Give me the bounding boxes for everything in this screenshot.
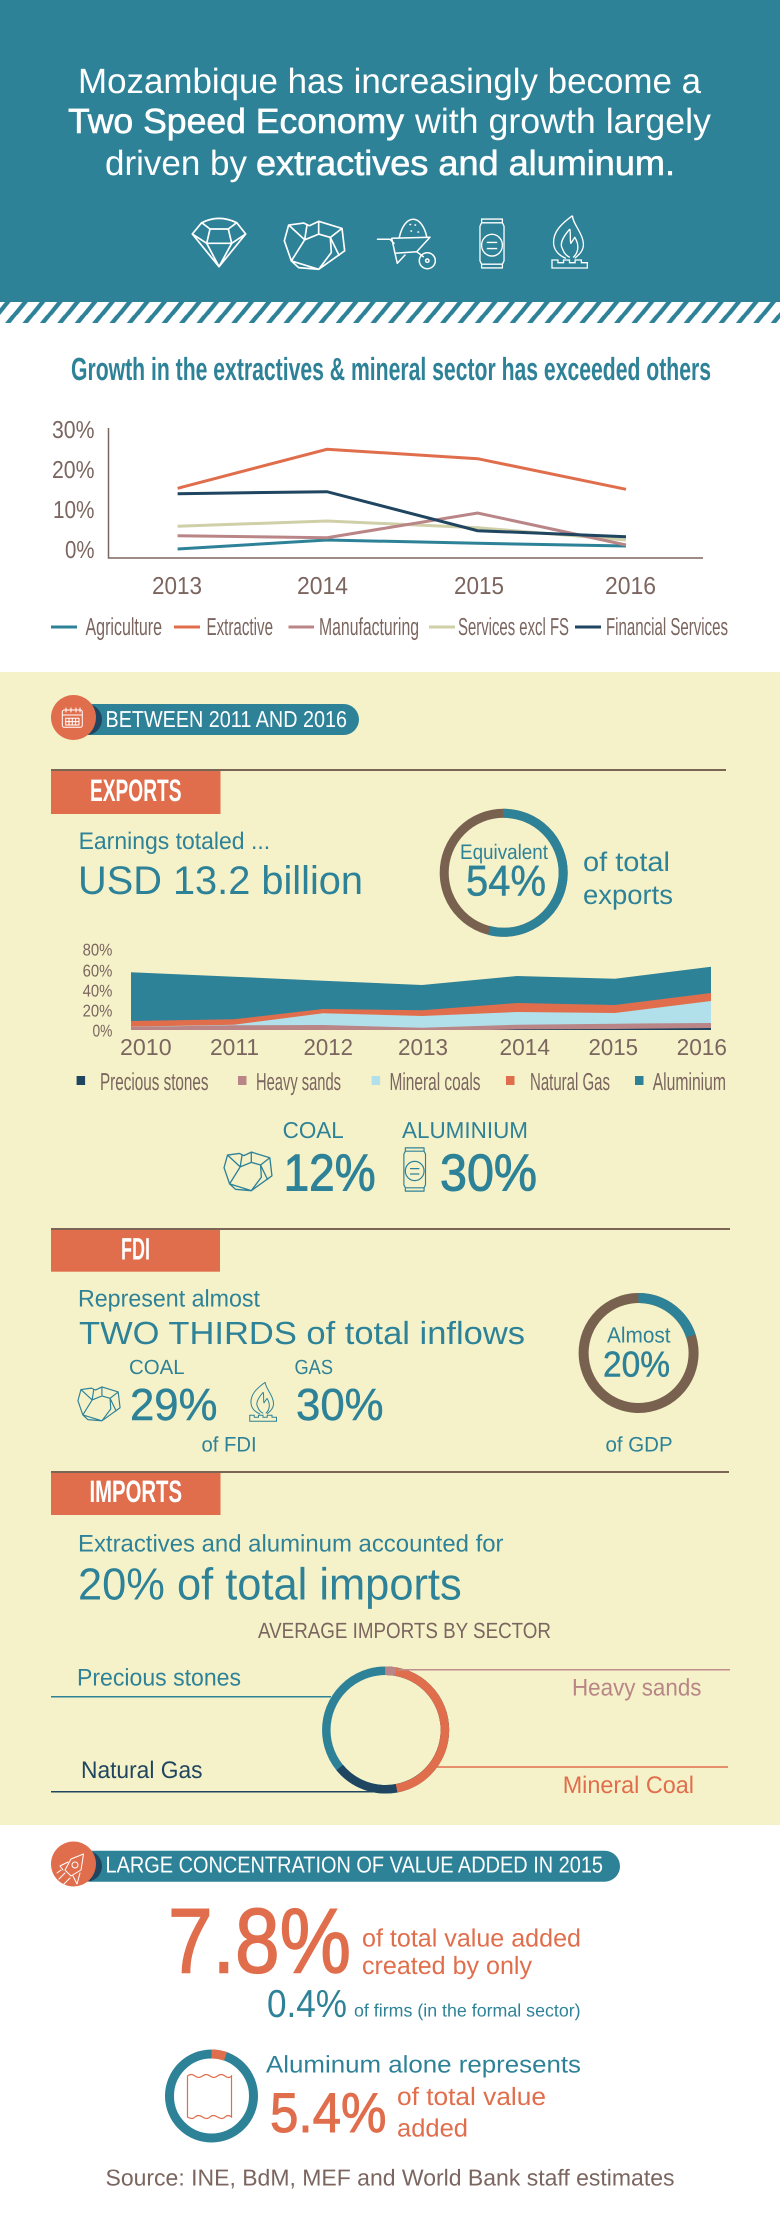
area chart legend: Mineral coals (390, 1069, 480, 1096)
imports header (51, 1472, 729, 1515)
exports header (51, 770, 726, 814)
FDI header: FDI (121, 1231, 150, 1266)
stat: 5.4 percent: 5.4% (270, 2081, 386, 2144)
title: Mozambique has increasingly become a (78, 62, 702, 101)
donut: average imports by sector: Natural Gas (81, 1757, 202, 1784)
stat: aluminium 30 percent: 30% (440, 1145, 537, 1203)
FDI text (78, 1286, 525, 1351)
source note: Source: INE, BdM, MEF and World Bank staff estimates (106, 2165, 674, 2191)
icon: gas flame (552, 216, 587, 268)
stat: FDI coal: 29% (130, 1379, 217, 1430)
donut: 20 percent of GDP: Almost (607, 1323, 671, 1348)
stat: 5.4 percent: of total value (397, 2083, 546, 2111)
icon: coal rock (284, 221, 345, 269)
area chart: exports by product: 40% (83, 982, 112, 1001)
imports header: IMPORTS (90, 1474, 182, 1509)
text: of total exports: of total (583, 847, 670, 877)
stat: aluminium 30 percent: ALUMINIUM (402, 1117, 528, 1143)
stat: FDI coal (78, 1356, 217, 1430)
line chart: sector growth (52, 417, 703, 600)
FDI header (51, 1229, 730, 1272)
area chart: exports by product: 2013 (398, 1034, 448, 1060)
icon: wheelbarrow with sand (378, 219, 435, 269)
FDI text: Represent almost (78, 1286, 260, 1313)
area chart legend: Heavy sands (256, 1069, 341, 1096)
area chart: exports by product: 2016 (677, 1034, 727, 1060)
chart legend: Extractive (206, 614, 273, 641)
donut: 54 percent of exports: Equivalent (460, 841, 548, 864)
icon: aluminium can (480, 219, 504, 268)
area chart legend: Aluminium (653, 1069, 726, 1096)
line chart: sector growth: 30% (52, 417, 94, 444)
stat: 7.8 percent (168, 1891, 581, 1993)
area chart: exports by product: 2011 (210, 1034, 259, 1060)
donut: 20 percent of GDP: 20% (603, 1344, 670, 1385)
exports earnings text (78, 828, 363, 903)
donut: average imports by sector (51, 1665, 730, 1799)
stat: aluminium 30 percent (402, 1117, 537, 1203)
donut: aluminum share (170, 2054, 254, 2138)
stat: 0.4 percent: of firms (in the formal sector) (354, 2001, 581, 2021)
donut: average imports by sector: Heavy sands (572, 1675, 702, 1702)
area chart legend: Natural Gas (530, 1069, 610, 1096)
area chart: exports by product: 80% (83, 940, 112, 959)
title: Two Speed Economy (68, 102, 404, 141)
text: of total exports: exports (583, 880, 673, 910)
area chart: exports by product (83, 940, 727, 1060)
donut: average imports by sector: Precious stones (77, 1665, 241, 1692)
text: of GDP: of GDP (606, 1434, 673, 1457)
panel: header (0, 0, 780, 302)
donut: 54 percent of exports: 54% (466, 858, 546, 906)
imports text: Extractives and aluminum accounted for (78, 1531, 504, 1558)
chart legend: Services excl FS (458, 614, 569, 641)
area chart legend (77, 1069, 726, 1096)
stat: 7.8 percent: 7.8% (168, 1891, 351, 1993)
stat: 7.8 percent: of total value added (362, 1925, 581, 1953)
section pill: between 2011 and 2016 (51, 695, 359, 740)
area chart legend: Precious stones (100, 1069, 208, 1096)
stat: FDI gas (250, 1356, 384, 1430)
donut: 54 percent of exports (444, 813, 563, 932)
stat: 0.4 percent (267, 1983, 581, 2026)
stat: FDI gas: GAS (294, 1356, 333, 1379)
stat: FDI coal: COAL (129, 1356, 185, 1379)
imports chart heading: AVERAGE IMPORTS BY SECTOR (258, 1618, 551, 1643)
icon: diamond (192, 218, 246, 267)
imports text (78, 1531, 504, 1609)
stat: 5.4 percent (266, 2052, 581, 2144)
area chart: exports by product: 60% (83, 962, 112, 981)
exports header: EXPORTS (90, 773, 182, 808)
title (68, 62, 712, 183)
line chart: sector growth: 2014 (297, 573, 348, 600)
icon: aluminium sheet (188, 2074, 232, 2118)
chart legend: Manufacturing (319, 614, 419, 641)
icon: rocket (57, 1854, 84, 1885)
area chart: exports by product: 2015 (588, 1034, 638, 1060)
stat: 5.4 percent: Aluminum alone represents (266, 2052, 581, 2079)
stat: 0.4 percent: 0.4% (267, 1983, 347, 2026)
stat: FDI gas: 30% (296, 1379, 384, 1430)
area chart: exports by product: 0% (92, 1022, 112, 1041)
title: with growth largely (414, 102, 712, 141)
icon: calendar (62, 708, 82, 727)
panel: cream section (0, 672, 780, 1825)
exports earnings text: Earnings totaled ... (79, 828, 270, 855)
line chart: sector growth: 2013 (152, 573, 202, 600)
line chart: sector growth: 0% (65, 537, 94, 564)
title: extractives and aluminum. (256, 144, 675, 183)
stat: coal 12 percent: COAL (283, 1117, 344, 1143)
section pill: value added: LARGE CONCENTRATION OF VALUE ADDED IN 2015 (106, 1852, 603, 1878)
section pill: between 2011 and 2016: BETWEEN 2011 AND 2016 (106, 706, 347, 732)
area chart: exports by product: 2010 (120, 1034, 172, 1060)
area chart: exports by product: 2012 (304, 1034, 353, 1060)
text: of FDI: of FDI (202, 1434, 257, 1457)
stat: 7.8 percent: created by only (362, 1952, 532, 1980)
donut: 20 percent of GDP (584, 1298, 694, 1408)
stat: 5.4 percent: added (397, 2115, 468, 2143)
chart legend: Agriculture (86, 614, 162, 641)
text: of total exports (583, 847, 673, 910)
line chart: sector growth: 10% (53, 497, 94, 524)
decorative stripe band (0, 302, 780, 323)
title: driven by (105, 144, 247, 183)
stat: coal 12 percent: 12% (284, 1145, 376, 1203)
area chart: exports by product: 2014 (500, 1034, 550, 1060)
chart legend (51, 614, 728, 641)
line chart: sector growth: 2016 (605, 573, 656, 600)
imports text: 20% of total imports (78, 1558, 462, 1609)
line chart: sector growth: 20% (52, 457, 94, 484)
line chart: sector growth: 2015 (454, 573, 504, 600)
FDI text: TWO THIRDS of total inflows (79, 1315, 525, 1351)
section pill: value added (51, 1842, 620, 1886)
exports earnings text: USD 13.2 billion (78, 859, 363, 903)
area chart: exports by product: 20% (83, 1002, 112, 1021)
donut: average imports by sector: Mineral Coal (563, 1772, 694, 1799)
stat: coal 12 percent (224, 1117, 376, 1203)
